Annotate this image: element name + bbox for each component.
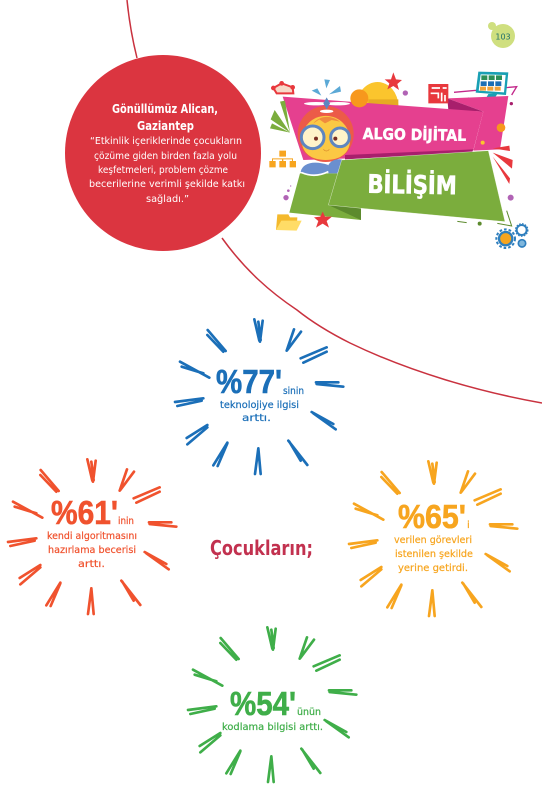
icon: red rays right — [493, 146, 513, 184]
icon: red circuit board — [428, 84, 448, 103]
label red: inin — [118, 516, 134, 527]
quote text: becerilerine verimli şekilde katkı — [89, 179, 245, 190]
icon: red star bottom — [314, 212, 332, 228]
page number badge — [488, 22, 515, 48]
decorative dots — [283, 90, 514, 226]
label blue: sinin — [283, 386, 304, 397]
label orange: verilen görevleri — [394, 535, 472, 546]
green ribbon left — [289, 173, 361, 220]
label red — [47, 516, 137, 570]
propeller hat — [304, 79, 350, 113]
label green: ünün — [297, 707, 321, 718]
icon: orange ball — [350, 89, 368, 107]
label red: kendi algoritmasını — [47, 531, 137, 542]
label orange: i — [467, 520, 470, 531]
label blue: arttı. — [242, 413, 271, 424]
quote text: sağladı.” — [146, 193, 189, 205]
quote author — [112, 102, 218, 133]
stat: blue 77 — [175, 319, 343, 474]
decorative red curve — [127, 0, 542, 403]
icon: half sun — [357, 82, 398, 106]
banner title: ALGO DİJİTAL — [363, 124, 466, 145]
label red: arttı. — [78, 559, 105, 570]
green ribbon front — [328, 151, 505, 222]
banner: Algo Dijital Bilişim — [269, 72, 528, 248]
stat: orange 65 — [349, 461, 517, 616]
heading: Çocukların: Çocukların; — [210, 536, 313, 560]
quote text: keşfetmeleri, problem çözme — [98, 165, 228, 176]
value 77: %77' — [216, 363, 282, 400]
label red: hazırlama becerisi — [48, 545, 136, 556]
pink ribbon front — [283, 97, 483, 160]
burst rays blue — [175, 319, 343, 474]
quote author: Gaziantep — [137, 119, 194, 133]
label orange: yerine getirdi. — [398, 563, 468, 574]
burst rays green — [188, 627, 356, 782]
page number badge: 103 — [495, 32, 511, 42]
icon: gears — [496, 224, 528, 248]
quote author: Gönüllümüz Alican, — [112, 102, 218, 116]
label orange — [394, 520, 473, 574]
icon: green fan — [270, 101, 290, 133]
quote text: “Etkinlik içeriklerinde çocukların — [90, 136, 242, 147]
character — [298, 106, 354, 175]
icon: folder — [276, 214, 302, 231]
icon: red star top — [385, 72, 402, 90]
label blue: teknolojiye ilgisi — [220, 400, 299, 411]
stat: green 54 — [188, 627, 356, 782]
label blue — [220, 386, 304, 424]
label orange: istenilen şekilde — [395, 549, 473, 560]
icon: monitor and keyboard — [454, 72, 517, 109]
value 65: %65' — [398, 498, 466, 535]
quote text — [89, 136, 245, 205]
icon: orange tree chart — [269, 151, 296, 167]
value 54: %54' — [230, 685, 296, 722]
quote text: çözüme giden birden fazla yolu — [94, 151, 237, 162]
pink ribbon back — [447, 96, 508, 151]
burst rays red — [8, 459, 176, 614]
quote circle panel — [65, 55, 261, 251]
icon: red network cluster — [272, 82, 294, 93]
value 61: %61' — [51, 494, 118, 531]
label green — [222, 707, 323, 733]
stat: red 61 — [8, 459, 176, 614]
label green: kodlama bilgisi arttı. — [222, 722, 323, 733]
banner subtitle: BİLİŞİM — [367, 169, 457, 200]
burst rays orange — [349, 461, 517, 616]
